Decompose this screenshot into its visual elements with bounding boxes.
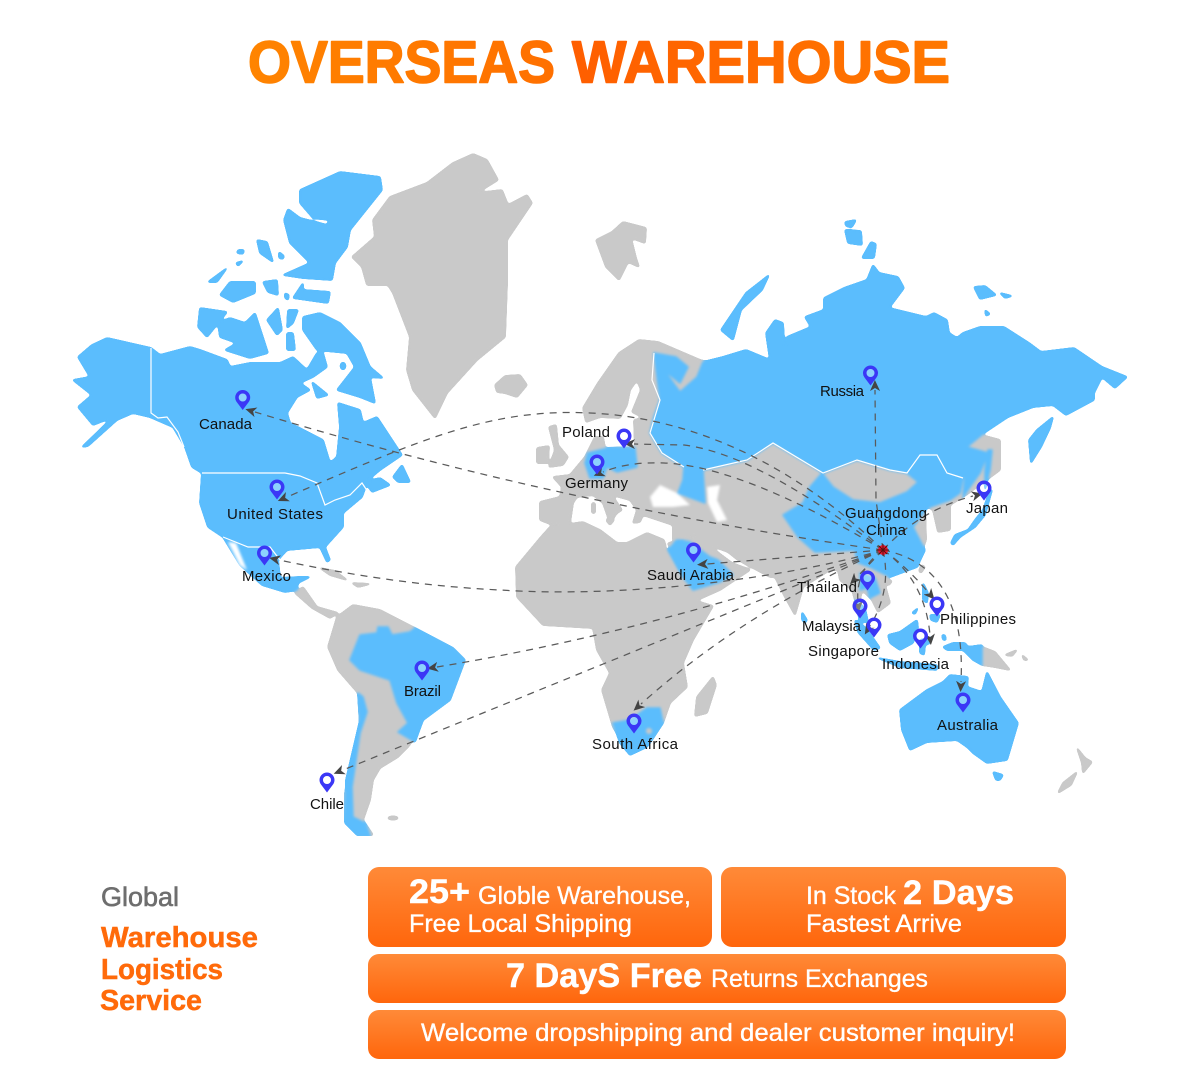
panel: 7 days free [368,954,1066,1003]
country labels: Brazil [404,683,441,700]
land: Africa [516,522,713,755]
country: Germany and Poland [585,448,637,478]
country: Japan [951,490,992,545]
origin marker: Guangdong China [877,544,889,556]
country: Australia [900,672,1018,780]
sea: Caspian [707,485,727,522]
country labels: Singapore [808,643,879,660]
sea: Black Sea [650,485,690,507]
country: Brazil [350,627,465,742]
panel: 7 days free: Returns Exchanges [711,965,928,993]
country labels: Indonesia [882,656,950,673]
pin: Indonesia [913,628,928,648]
Baja gulf [228,542,247,570]
land: Papua New Guinea [982,647,1028,670]
panel: 7 days free: 7 DayS Free [506,957,702,995]
panel: 25+ warehouses [368,867,712,947]
panel: 25+ warehouses: Globle Warehouse, [478,882,691,910]
pin: Philippines [930,596,944,616]
land: New Zealand [1058,748,1092,793]
country labels [199,383,1016,813]
pin: Australia [956,692,970,712]
panel: 2 days: 2 Days [903,874,1014,912]
left heading: Warehouse Logistics Service [100,922,258,1017]
country labels: Canada [199,416,253,433]
land: Falklands [388,816,398,820]
land: UK and Ireland [537,425,568,467]
country labels: South Africa [592,736,679,753]
land: Central America and Caribbean [295,568,370,618]
land: Iceland [495,375,527,397]
country labels: Japan [966,500,1008,517]
title [248,29,950,95]
pin: Germany [590,454,604,474]
country labels: United States [227,506,323,523]
country labels: Poland [562,424,610,441]
panel: 2 days: In Stock [806,882,896,910]
pin: Japan [976,480,992,500]
country labels: China [866,522,907,539]
country labels: Philippines [940,611,1016,628]
country labels: Guangdong [845,505,927,522]
panel: dropshipping welcome [368,1010,1066,1059]
country: Russia [650,265,1127,503]
world map [73,154,1127,835]
land: Svalbard [596,222,646,280]
land: Eurasia grey [540,340,1000,615]
pin: Chile [320,772,334,792]
panel: 25+ warehouses: Free Local Shipping [409,910,632,938]
title: WAREHOUSE [572,29,950,95]
pin: Saudi Arabia [686,542,701,562]
country labels: Mexico [242,568,291,585]
left heading: Warehouse Logistics Service: Warehouse [101,922,258,954]
country: Saudi Arabia [668,540,733,590]
pin: Singapore [866,618,882,638]
land: Madagascar [695,677,716,716]
countries: Southeast Asia [802,573,982,670]
pin: Malaysia [852,598,868,618]
landmasses [73,154,1127,835]
pin: Poland [616,428,632,448]
country: South Africa [613,708,663,755]
country: Chile [345,693,370,835]
Canada islands [198,172,410,492]
land: Arabia [668,537,750,602]
panel: 2 days: Fastest Arrive [806,910,962,938]
country borders [151,348,963,560]
pin: Thailand [860,570,875,590]
Arctic islands [721,220,1012,340]
pin: Brazil [414,660,430,680]
left heading: Warehouse Logistics Service: Logistics [101,954,223,986]
land: South America [328,605,465,835]
left heading: Warehouse Logistics Service: Service [100,985,202,1017]
country: China [783,455,963,577]
country labels: Malaysia [802,618,862,635]
land: Greenland [352,154,532,418]
Kamchatka and Sakhalin [985,417,1053,490]
panel: 25+ warehouses: 25+ [409,873,470,911]
country labels: Saudi Arabia [647,567,735,584]
country labels: Thailand [797,579,857,596]
pin: United States [270,480,284,500]
title: OVERSEAS [248,29,555,95]
country labels: Australia [937,717,999,734]
pin: Mexico [257,546,272,566]
country labels: Russia [820,383,865,400]
country: Canada, USA, Mexico [73,338,402,592]
land: Med islands [592,503,614,525]
pin: South Africa [626,714,642,734]
pin: Canada [235,390,250,410]
panel: 2 days [721,867,1066,947]
left heading: Global: Global [101,882,179,912]
panel: dropshipping welcome: Welcome dropshipping and dealer customer inquiry! [421,1019,1015,1047]
country labels: Chile [310,796,344,813]
pin: Russia [863,366,878,386]
country labels: Germany [565,475,628,492]
land: Hainan and Taiwan [885,565,925,585]
route lines [255,390,973,770]
